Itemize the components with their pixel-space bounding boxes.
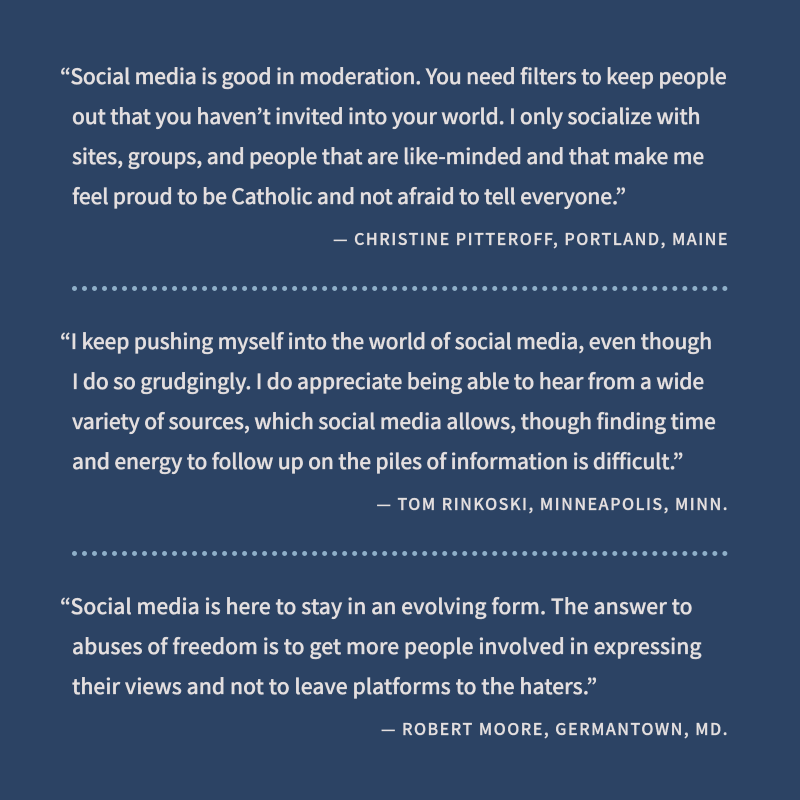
quote 2 text	[60, 326, 716, 476]
text: “I keep pushing myself into the world of social media, even though	[60, 326, 712, 356]
text: “Social media is good in moderation. You need filters to keep people	[60, 61, 727, 91]
quote 1 text	[60, 61, 727, 211]
text: feel proud to be Catholic and not afraid to tell everyone.”	[72, 181, 626, 211]
text: sites, groups, and people that are like-minded and that make me	[72, 141, 704, 171]
text: and energy to follow up on the piles of information is difficult.”	[72, 446, 683, 476]
text: their views and not to leave platforms to the haters.”	[72, 671, 597, 701]
quote 3	[60, 591, 729, 740]
quote 2 attribution: — TOM RINKOSKI, MINNEAPOLIS, MINN.	[376, 491, 729, 515]
quote 2	[60, 326, 729, 515]
quote 3 attribution: — ROBERT MOORE, GERMANTOWN, MD.	[381, 716, 729, 740]
text: I do so grudgingly. I do appreciate being able to hear from a wide	[72, 366, 704, 396]
quote 3 text	[60, 591, 702, 701]
text: abuses of freedom is to get more people involved in expressing	[72, 631, 702, 661]
text: “Social media is here to stay in an evolving form. The answer to	[60, 591, 693, 621]
text: variety of sources, which social media allows, though finding time	[72, 406, 716, 436]
quote 1 attribution: — CHRISTINE PITTEROFF, PORTLAND, MAINE	[333, 226, 729, 250]
text: out that you haven’t invited into your world. I only socialize with	[72, 101, 700, 131]
quote 1	[60, 61, 729, 250]
